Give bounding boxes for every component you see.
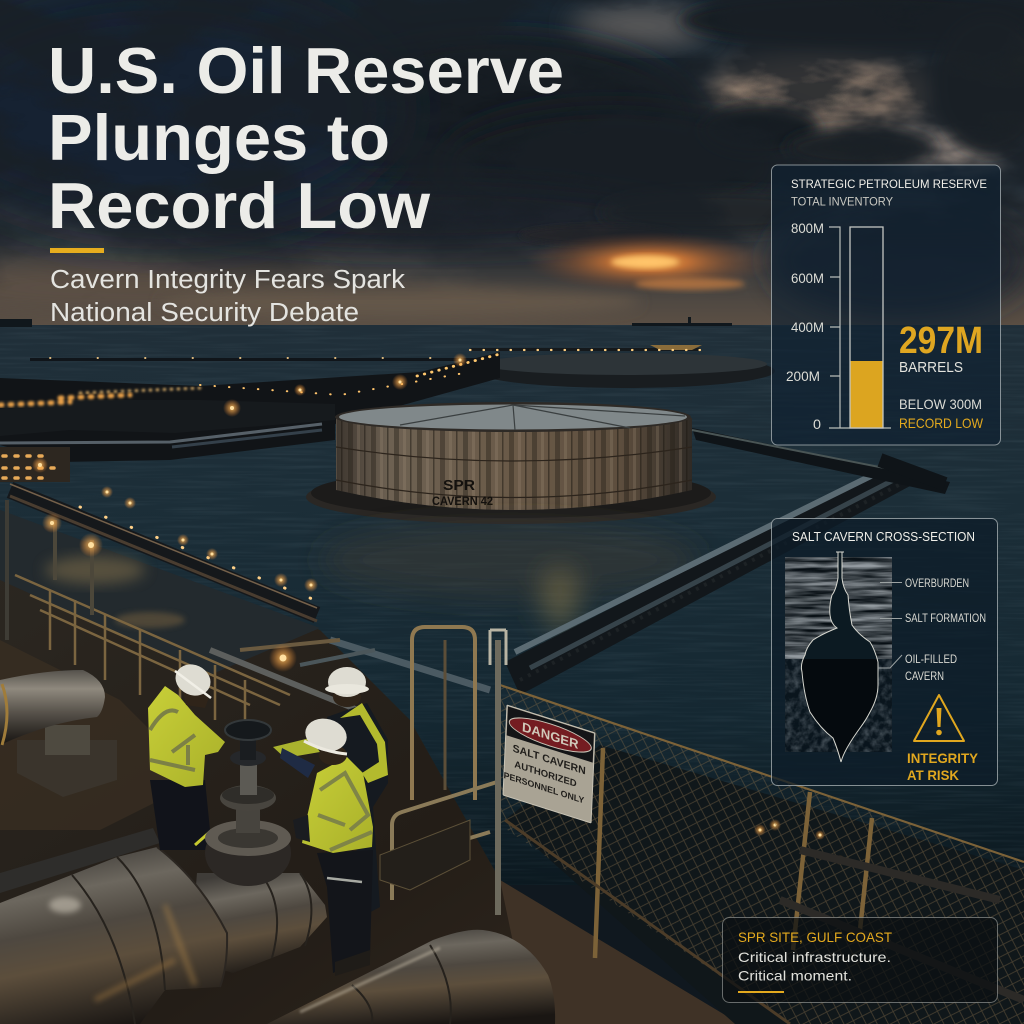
main storage tank: SPR Cavern 42: [306, 402, 716, 524]
leader lines: [878, 582, 902, 668]
site tagline: Critical infrastructure.: [738, 949, 891, 965]
worker with helmet, left: [148, 659, 225, 850]
danger sign: [503, 705, 595, 823]
elbow pipe: [267, 930, 555, 1024]
figure captions: BARRELS: [899, 359, 963, 376]
string of deck lights: [32, 353, 845, 865]
foreground deck: [0, 510, 740, 1024]
diagram labels: SALT FORMATION: [905, 611, 986, 625]
key figure: 297M: [899, 320, 983, 362]
gauge bar: [850, 227, 883, 428]
panel heading: TOTAL INVENTORY: [791, 194, 893, 208]
tank stencil text: SPR: [443, 477, 475, 494]
diagram labels: [905, 576, 986, 683]
panel: strategic petroleum reserve inventory: [772, 165, 1000, 445]
title: Plunges to: [48, 101, 390, 174]
danger sign: AUTHORIZED: [514, 759, 577, 790]
valve assembly: [205, 720, 291, 886]
axis labels: 200M: [786, 368, 820, 384]
title: U.S. Oil Reserve: [48, 34, 564, 107]
diagram labels: OVERBURDEN: [905, 576, 969, 590]
icon: warning triangle: [914, 695, 964, 741]
subtitle: National Security Debate: [50, 299, 359, 327]
figure captions: BELOW 300M: [899, 396, 982, 412]
worker with helmet, front: [280, 714, 373, 976]
figure captions: [899, 359, 984, 431]
danger sign: DANGER: [522, 719, 579, 752]
tank stencil text: [432, 477, 493, 508]
left pier network: [0, 352, 500, 482]
site location: SPR SITE, GULF COAST: [738, 929, 892, 945]
big foreground pipe: [0, 847, 327, 1024]
water reflection: [320, 522, 700, 630]
title accent line: [50, 248, 104, 253]
panel heading: STRATEGIC PETROLEUM RESERVE: [791, 177, 987, 191]
danger sign: SALT CAVERN: [512, 743, 586, 778]
integrity warning: [907, 750, 979, 783]
integrity warning: AT RISK: [907, 767, 959, 783]
left upper pipe and pump base: [0, 670, 117, 797]
deck railings: [7, 500, 490, 730]
far circular platforms: [30, 345, 775, 388]
sky and clouds: [0, 0, 1024, 330]
sea: [0, 325, 1024, 885]
diagram labels: CAVERN: [905, 669, 944, 683]
worker with helmet, rear: [273, 667, 388, 915]
secondary horizontal pipe: [0, 828, 160, 893]
danger sign: PERSONNEL ONLY: [503, 770, 584, 805]
integrity warning: INTEGRITY: [907, 750, 979, 766]
site tagline: Critical moment.: [738, 968, 852, 984]
metal grate platform: [380, 820, 470, 890]
panel: salt cavern cross-section: [772, 518, 998, 786]
axis labels: 400M: [791, 319, 824, 335]
helmet: [170, 659, 216, 708]
title: Record Low: [48, 169, 430, 242]
gate pipe and handrails: [392, 627, 506, 900]
panel heading: SALT CAVERN CROSS-SECTION: [792, 529, 975, 544]
panel: site caption: [722, 918, 998, 1002]
axis labels: [786, 220, 824, 432]
helmet: [325, 667, 369, 697]
figure captions: RECORD LOW: [899, 415, 984, 431]
axis labels: 0: [813, 416, 821, 432]
site tagline: [738, 949, 891, 984]
helmet: [302, 714, 350, 756]
distant horizon structures: [0, 317, 732, 327]
subtitle: Cavern Integrity Fears Spark: [50, 266, 405, 294]
right pipeline pier: [505, 428, 950, 695]
axis labels: 600M: [791, 270, 824, 286]
subtitle: [50, 266, 405, 327]
diagram labels: OIL-FILLED: [905, 652, 957, 666]
panel heading: [791, 177, 987, 208]
title: [48, 34, 564, 242]
cavern diagram: [785, 552, 892, 764]
dark shore behind fence: [505, 745, 1024, 1024]
tank stencil text: CAVERN 42: [432, 494, 493, 508]
axis labels: 800M: [791, 220, 824, 236]
left walkway to deck: [10, 484, 320, 621]
chain-link fence: [498, 640, 1024, 1024]
